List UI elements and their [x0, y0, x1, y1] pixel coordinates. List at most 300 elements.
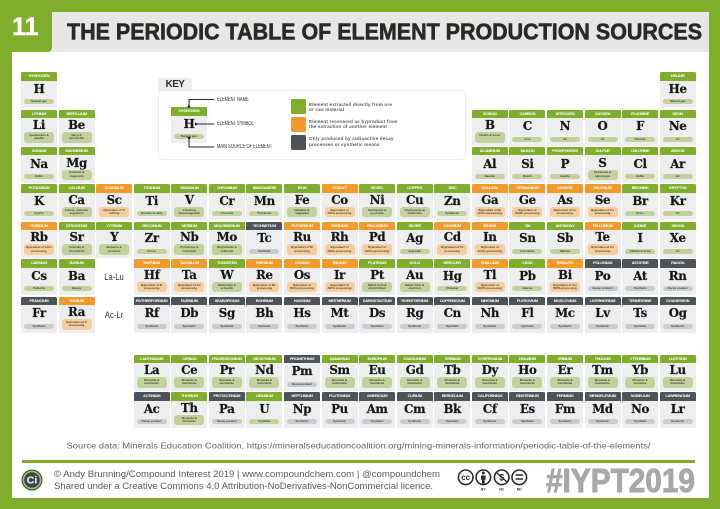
- cell: No: No: [631, 402, 649, 416]
- cell: P: [547, 147, 583, 183]
- cell: Pb: LEAD: [523, 260, 532, 265]
- cell: Sn: Sn: [519, 231, 536, 245]
- cell: Yb: [622, 355, 658, 391]
- cell: Db: Synthetic: [183, 324, 196, 328]
- cell: C: Coal: [524, 137, 531, 141]
- footer credits: Shared under a Creative Commons 4.0 Attribution-NoDerivatives-NonCommercial licence.: [54, 481, 433, 492]
- icon: creative commons badges: cc: [461, 473, 471, 482]
- cell: Cr: CHROMIUM: [217, 185, 237, 190]
- key sample cell: H: [184, 117, 194, 131]
- cell: Nh: Synthetic: [483, 324, 496, 328]
- cell: Pd: Byproduct of Ni/Cu processing: [365, 245, 389, 253]
- cell: Cl: Cl: [633, 157, 647, 171]
- cell: Bk: [434, 392, 470, 428]
- cell: Bk: BERKELIUM: [442, 393, 463, 398]
- cell: Ac: Ac: [144, 402, 160, 416]
- cell: Cd: CADMIUM: [444, 223, 461, 228]
- cell: Co: Byproduct of Ni/Cu processing: [328, 208, 351, 215]
- cell: Ra: RADIUM: [69, 298, 84, 303]
- cell: Ar: [660, 147, 696, 183]
- cell: Ne: [660, 110, 696, 146]
- cell: V: V: [185, 193, 194, 207]
- cell: Mt: Mt: [331, 306, 348, 320]
- cell: Th: Monazite & thorianite: [182, 416, 197, 423]
- cell: Sm: Sm: [329, 363, 350, 377]
- cell: Te: [585, 222, 621, 258]
- cell: Mt: MEITNERIUM: [328, 298, 351, 303]
- cell: Tb: TERBIUM: [444, 356, 460, 361]
- cell: Kr: Kr: [670, 194, 686, 208]
- cell: Fl: Synthetic: [521, 324, 534, 328]
- cell: Hs: [284, 297, 320, 333]
- cell: La: Monazite & bastnäsite: [144, 378, 159, 385]
- cell: Hg: [434, 259, 470, 295]
- cell: H: [21, 72, 57, 108]
- cell: Yb: Monazite & xenotime: [632, 378, 648, 385]
- cell: Re: Re: [256, 268, 273, 282]
- cell: Ra: [59, 297, 95, 333]
- cell: Th: [171, 392, 207, 428]
- cell: At: ASTATINE: [632, 260, 649, 265]
- cell: Np: [284, 392, 320, 428]
- cell: Pa: Pa: [219, 402, 235, 416]
- cell: Bh: Synthetic: [258, 324, 271, 328]
- cell: Rg: Synthetic: [408, 324, 421, 328]
- cell: Th: Th: [181, 401, 198, 415]
- cell: Ti: Ti: [145, 194, 158, 208]
- cell: Mn: Mn: [254, 194, 275, 208]
- cell: Og: [660, 297, 696, 333]
- cell: La: LANTHANUM: [140, 356, 163, 361]
- icon: Compound Interest logo: [22, 470, 42, 490]
- cell: F: F: [636, 119, 644, 133]
- cell: Pb: Pb: [519, 269, 536, 283]
- cell: Ba: BARIUM: [69, 260, 84, 265]
- cell: Bi: Byproduct of Cu/ W/Pb processing: [553, 283, 577, 290]
- cell: Na: Na: [30, 157, 48, 171]
- cell: K: [21, 184, 57, 220]
- cell: Al: ALUMINIUM: [480, 148, 500, 153]
- cell: Ga: Byproduct of Al/ Zn/Cu processing: [478, 208, 502, 215]
- cell: Fe: IRON: [298, 185, 306, 190]
- cell: Ar: ARGON: [671, 148, 684, 153]
- cell: Es: EINSTEINIUM: [516, 393, 539, 398]
- cell: Gd: GADOLINIUM: [403, 356, 426, 361]
- cell: Ts: Ts: [633, 306, 647, 320]
- cell: Ta: Ta: [182, 268, 197, 282]
- cell: K: POTASSIUM: [29, 185, 49, 190]
- cell: Mn: [246, 184, 282, 220]
- cell: K: K: [34, 194, 44, 208]
- key label: main source: MAIN SOURCE OF ELEMENT: [217, 144, 272, 150]
- cell: Ir: Ir: [334, 268, 345, 282]
- cell: Cr: Cr: [219, 194, 234, 208]
- cell: No: Synthetic: [634, 419, 647, 423]
- cell: Te: Te: [595, 230, 610, 244]
- cell: N: [547, 110, 583, 146]
- footer credits: [54, 469, 440, 492]
- cell: Am: [359, 392, 395, 428]
- cell: Kr: KRYPTON: [669, 185, 686, 190]
- label: actinides: Ac-Lr: [105, 310, 123, 321]
- cell: Pm: PROMETHIUM: [290, 356, 314, 361]
- cell: Na: SODIUM: [32, 148, 46, 153]
- cell: Ac: ACTINIUM: [143, 393, 160, 398]
- key text: dark: Only produced by radioactive decay: [309, 136, 394, 141]
- cell: F: Fluorite: [635, 137, 645, 141]
- cell: B: [472, 110, 508, 146]
- cell: Og: Synthetic: [671, 324, 684, 328]
- cell: Er: [547, 355, 583, 391]
- cell: I: I: [638, 231, 643, 245]
- cell: Sb: Stibnite: [560, 249, 570, 253]
- cell: No: [622, 392, 658, 428]
- cell: Ir: Byproduct of Ni/Cu processing: [328, 283, 351, 290]
- cell: B: BORON: [483, 111, 497, 116]
- cell: Nd: Monazite & bastnäsite: [257, 378, 272, 385]
- cell: Cr: Chromite: [220, 211, 233, 215]
- cell: Nd: Nd: [255, 363, 274, 377]
- cell: Sg: Synthetic: [220, 324, 233, 328]
- cell: Cs: Pollucite: [33, 286, 45, 290]
- cell: Cl: [622, 147, 658, 183]
- cell: He: [660, 72, 696, 108]
- cell: Cn: COPERNICIUM: [440, 298, 465, 303]
- cell: Rb: RUBIDIUM: [30, 223, 48, 228]
- key tab with heading: KEY: [166, 79, 184, 90]
- cell: In: Byproduct of Zn/Cu processing: [478, 245, 502, 253]
- cell: Lr: [660, 392, 696, 428]
- cell: Cf: Synthetic: [483, 419, 496, 423]
- cell: Cm: [397, 392, 433, 428]
- cell: W: Wolframite & scheelite: [218, 283, 236, 290]
- cell: In: In: [483, 230, 497, 244]
- cell: Hg: MERCURY: [443, 260, 461, 265]
- key text: dark: processes or synthetic means: [309, 142, 380, 147]
- key tab with heading: [158, 78, 192, 91]
- cell: Sc: SCANDIUM: [105, 185, 124, 190]
- cell: Mg: Dolomite & magnesite: [69, 170, 84, 178]
- cell: Ge: [509, 184, 545, 220]
- cell: Er: Monazite & bastnäsite: [557, 378, 573, 385]
- cell: Fm: FERMIUM: [557, 393, 573, 398]
- cell: Gd: Gd: [406, 363, 424, 377]
- cell: Tl: Byproduct of Zn/Pb processing: [478, 283, 502, 290]
- cell: Po: Decay product: [592, 286, 613, 290]
- cell: Te: TELLURIUM: [592, 223, 613, 228]
- swatch: green: [291, 99, 306, 114]
- cell: U: U: [259, 402, 269, 416]
- key text: green: Element extracted directly from ore: [309, 102, 392, 106]
- cell: Tl: Tl: [483, 268, 496, 282]
- cell: Cm: CURIUM: [408, 393, 422, 398]
- cell: Os: Byproduct of Ni/Cu processing: [290, 283, 314, 290]
- cell: Pm: [284, 355, 320, 391]
- cell: Og: Og: [669, 306, 687, 320]
- cell: Lv: [585, 297, 621, 333]
- key text: dark: [309, 136, 394, 147]
- cell: Ca: [59, 184, 95, 220]
- cell: Ba: Baryte: [72, 286, 81, 290]
- cell: Be: Be: [68, 118, 85, 132]
- cell: Rn: Rn: [669, 269, 687, 283]
- cell: Co: Co: [331, 193, 348, 207]
- key sample cell: Natural gas: [181, 134, 197, 138]
- cell: He: Natural gas: [670, 99, 686, 103]
- cell: Ar: Air: [676, 174, 680, 178]
- cell: W: [209, 259, 245, 295]
- cell: Md: Synthetic: [596, 419, 609, 423]
- cell: Hs: Hs: [293, 306, 311, 320]
- cell: Nd: [246, 355, 282, 391]
- cell: Rb: Rb: [30, 230, 48, 244]
- cell: Db: [171, 297, 207, 333]
- cell: Pu: Synthetic: [333, 419, 346, 423]
- cell: Br: Br: [632, 194, 648, 208]
- cell: Fe: [284, 184, 320, 220]
- cell: Xe: Xe: [670, 231, 686, 245]
- cell: Ir: IRIDIUM: [333, 260, 346, 265]
- cell: Hg: Hg: [443, 269, 462, 283]
- cell: Db: Db: [180, 306, 198, 320]
- cell: Ne: NEON: [672, 111, 683, 116]
- cell: Ts: TENNESSINE: [629, 298, 651, 303]
- cell: Rf: [134, 297, 170, 333]
- cell: Be: Beryl & bertrandite: [69, 133, 84, 140]
- cell: Nd: NEODYMIUM: [253, 356, 275, 361]
- cell: Mt: Synthetic: [333, 324, 346, 328]
- cell: Fm: [547, 392, 583, 428]
- cell: Pu: [322, 392, 358, 428]
- cell: Mg: MAGNESIUM: [65, 148, 88, 153]
- cell: Nb: Nb: [180, 230, 198, 244]
- cell: Ru: Ru: [293, 230, 311, 244]
- cell: Dy: Monazite & bastnäsite: [482, 378, 497, 385]
- cell: Au: Au: [406, 268, 423, 282]
- cell: Co: COBALT: [332, 185, 347, 190]
- cell: Sb: Sb: [557, 231, 573, 245]
- cell: Co: [322, 184, 358, 220]
- cell: Hg: Cinnabar: [446, 286, 459, 290]
- cell: Sn: [509, 222, 545, 258]
- cell: N: N: [560, 119, 570, 133]
- cell: Pt: Pt: [370, 268, 384, 282]
- cell: Ir: [322, 259, 358, 295]
- cell: Yb: Yb: [632, 363, 648, 377]
- infographic number: 11: [12, 13, 38, 41]
- cell: Rh: Rh: [331, 230, 348, 244]
- cell: Ce: Ce: [181, 363, 197, 377]
- cell: At: Synthetic: [634, 286, 647, 290]
- cell: Sr: STRONTIUM: [66, 223, 87, 228]
- cell: Si: Quartz: [523, 174, 532, 178]
- cell: Be: [59, 110, 95, 146]
- cell: Am: Am: [367, 402, 388, 416]
- cell: Mo: MOLYBDENUM: [214, 223, 240, 228]
- cell: Ds: Synthetic: [371, 324, 384, 328]
- cell: Pt: PLATINUM: [368, 260, 386, 265]
- cell: Rg: ROENTGENIUM: [401, 298, 428, 303]
- cell: Fl: [509, 297, 545, 333]
- cell: W: TUNGSTEN: [217, 260, 237, 265]
- cell: S: [585, 147, 621, 183]
- swatch: dark: [291, 134, 306, 150]
- cell: Ra: Byproduct of U processing: [66, 320, 87, 327]
- cell: Lr: Lr: [671, 402, 685, 416]
- icon: creative commons badges: $: [499, 472, 504, 482]
- cell: K: Sylvite: [34, 211, 44, 215]
- cell: No: NOBELIUM: [631, 393, 650, 398]
- cell: Tc: Synthetic: [258, 249, 271, 253]
- cell: Mc: Mc: [555, 306, 575, 320]
- cell: Cs: CAESIUM: [31, 260, 47, 265]
- cell: Cl: CHLORINE: [631, 148, 649, 153]
- cell: Sn: Cassiterite: [520, 249, 535, 253]
- cell: Cm: Cm: [404, 402, 425, 416]
- cell: Ce: Monazite & bastnäsite: [182, 378, 197, 385]
- cell: Sc: [96, 184, 132, 220]
- cell: Te: Byproduct of Cu processing: [591, 245, 614, 253]
- title bar: [52, 12, 709, 52]
- cell: Pt: [359, 259, 395, 295]
- panel: key: [158, 78, 466, 160]
- cell: Ru: Byproduct of Ni processing: [291, 245, 313, 253]
- cell: Sg: Sg: [219, 306, 235, 320]
- cell: Bi: Bi: [558, 268, 572, 282]
- cell: Ga: GALLIUM: [482, 185, 498, 190]
- cell: V: [171, 184, 207, 220]
- cell: Mo: Mo: [217, 230, 237, 244]
- cell: Hf: Byproduct of Zr processing: [141, 283, 163, 290]
- cell: Ho: HOLMIUM: [519, 356, 536, 361]
- cell: Hs: HASSIUM: [294, 298, 310, 303]
- cell: Rh: [322, 222, 358, 258]
- cell: Os: Os: [294, 268, 310, 282]
- cell: Rf: RUTHERFORDIUM: [136, 298, 167, 303]
- cell: Fr: Synthetic: [32, 324, 46, 328]
- cell: Pt: Native form & platiniridium: [368, 283, 387, 290]
- cell: Mn: MANGANESE: [253, 185, 276, 190]
- cell: Sg: SEABORGIUM: [215, 298, 239, 303]
- cell: Ho: [509, 355, 545, 391]
- cell: V: VANADIUM: [180, 185, 199, 190]
- cell: P: Apatite: [560, 174, 570, 178]
- cell: Ni: NICKEL: [371, 185, 384, 190]
- cell: Ga: Ga: [481, 193, 498, 207]
- cell: Ds: Ds: [369, 306, 385, 320]
- cell: He: He: [669, 82, 687, 96]
- cell: Tb: Monazite & bastnäsite: [445, 378, 460, 385]
- cell: U: [246, 392, 282, 428]
- cell: B: B: [485, 118, 495, 132]
- cell: Ba: [59, 259, 95, 295]
- cell: Rg: [397, 297, 433, 333]
- cell: Lu: LUTETIUM: [669, 356, 687, 361]
- cell: Fe: Hematite & magnetite: [294, 208, 310, 215]
- cell: N: Air: [563, 137, 567, 141]
- cell: H: H: [34, 82, 44, 96]
- cell: Fr: Fr: [32, 306, 46, 320]
- cell: Tc: Tc: [257, 231, 271, 245]
- cell: Dy: DYSPROSIUM: [478, 356, 502, 361]
- cell: O: [585, 110, 621, 146]
- cell: Li: Li: [33, 118, 45, 132]
- cell: Rf: Synthetic: [145, 324, 158, 328]
- cell: Bk: Bk: [443, 402, 461, 416]
- cell: Eu: Monazite & bastnäsite: [369, 378, 385, 385]
- cell: Nh: Nh: [480, 306, 499, 320]
- cell: Fm: Fm: [555, 402, 575, 416]
- cell: Ti: TITANIUM: [143, 185, 160, 190]
- cell: Rf: Rf: [145, 306, 159, 320]
- cell: Hf: Hf: [144, 268, 160, 282]
- cell: Cm: Synthetic: [408, 419, 421, 423]
- cell: Br: Brine: [636, 211, 644, 215]
- cell: Ts: [622, 297, 658, 333]
- cell: Rn: Decay product: [668, 286, 688, 290]
- cell: F: [622, 110, 658, 146]
- cell: Eu: [359, 355, 395, 391]
- key text: green: [309, 102, 392, 112]
- cell: Pd: Pd: [369, 230, 385, 244]
- cell: Mc: Synthetic: [558, 324, 571, 328]
- cell: B: Ulexite & borax: [479, 133, 500, 137]
- cell: Ce: CERIUM: [182, 356, 196, 361]
- cell: Ta: Byproduct of Sn processing: [178, 283, 200, 290]
- cell: H: Natural gas: [31, 99, 47, 103]
- icon: creative commons badges: BY: [481, 488, 486, 492]
- cell: Rh: Byproduct of Ni/Cu processing: [328, 245, 351, 253]
- cell: Sm: [322, 355, 358, 391]
- cell: Fl: Fl: [521, 306, 534, 320]
- cell: I: [622, 222, 658, 258]
- cell: Se: SELENIUM: [593, 185, 612, 190]
- cell: Li: [21, 110, 57, 146]
- cell: Kr: Air: [676, 211, 680, 215]
- cell: Mg: Mg: [66, 156, 87, 170]
- cell: Tm: [585, 355, 621, 391]
- cell: Sb: ANTIMONY: [556, 223, 574, 228]
- cell: Al: [472, 147, 508, 183]
- cell: Sm: SAMARIUM: [330, 356, 349, 361]
- cell: S: S: [598, 156, 607, 170]
- cell: As: ARSENIC: [557, 185, 573, 190]
- cell: Cu: COPPER: [407, 185, 422, 190]
- cell: Na: Halite: [35, 174, 43, 178]
- cell: Ti: [134, 184, 170, 220]
- cell: Ca: CALCIUM: [68, 185, 85, 190]
- cell: Es: [509, 392, 545, 428]
- cell: Zr: [134, 222, 170, 258]
- cell: Fe: Fe: [295, 193, 309, 207]
- cell: Ra: Ra: [68, 305, 85, 319]
- key text: orange: Element recovered as byproduct from: [309, 118, 398, 124]
- cell: He: HELIUM: [671, 73, 684, 78]
- key label: element symbol: ELEMENT SYMBOL: [217, 120, 254, 126]
- label: lanthanides: La-Lu: [104, 272, 124, 283]
- cell: Mc: MOSCOVIUM: [554, 298, 576, 303]
- cell: P: P: [561, 157, 569, 171]
- cell: Na: [21, 147, 57, 183]
- cell: Lv: Lv: [595, 306, 610, 320]
- cell: Er: ERBIUM: [558, 356, 572, 361]
- cell: Re: RHENIUM: [256, 260, 273, 265]
- icon: creative commons badges: NC: [499, 488, 505, 492]
- cell: Po: POLONIUM: [593, 260, 612, 265]
- cell: Zn: [434, 184, 470, 220]
- cell: Sr: Celestite & strontianite: [69, 245, 84, 253]
- cell: Zn: Sphalerite: [445, 211, 459, 215]
